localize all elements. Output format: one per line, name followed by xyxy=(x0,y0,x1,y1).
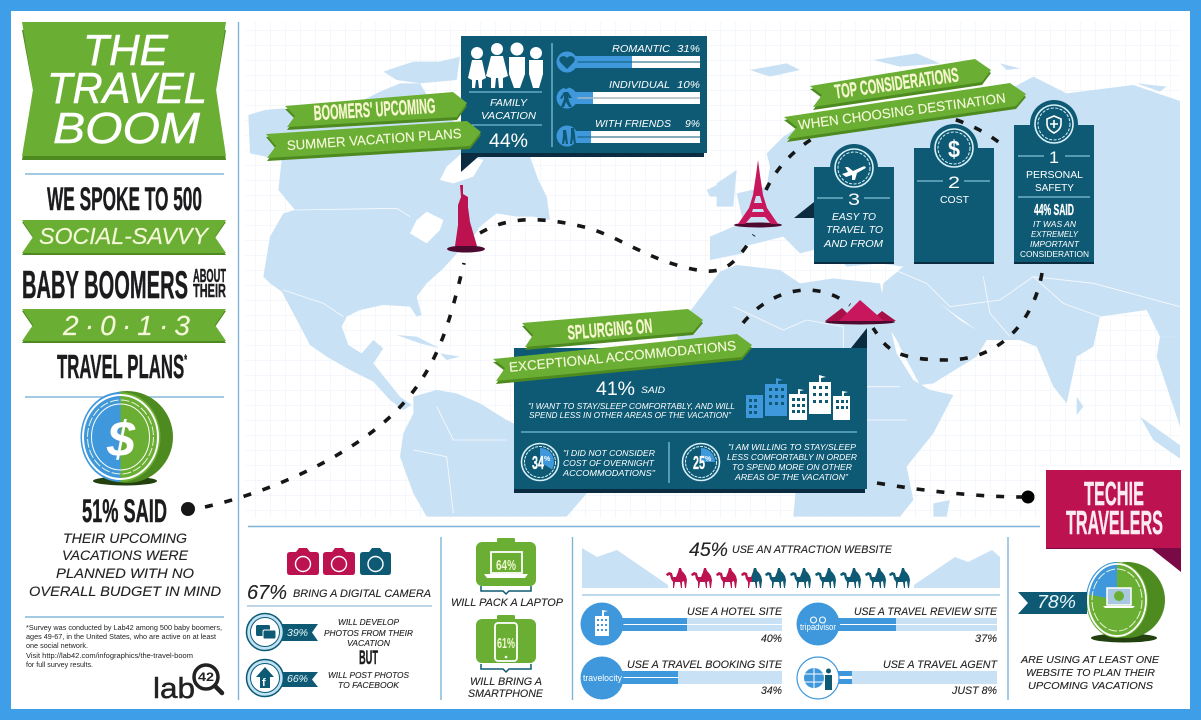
ribbon: social-savvy: SOCIAL-SAVVY xyxy=(39,223,210,249)
bar: travel review site 37%: USE A TRAVEL REVIEW SITE xyxy=(854,606,998,618)
card: 3 easy to travel: TRAVEL TO xyxy=(826,224,883,236)
card: 2 cost xyxy=(914,124,994,264)
ribbon: 78% xyxy=(1018,592,1087,614)
icon: suitcase with smartphone xyxy=(476,615,536,672)
stat: 66% post to facebook: WILL POST PHOTOS xyxy=(328,670,409,680)
panel: exceptional accommodations xyxy=(514,328,867,493)
icon: airplane badge xyxy=(835,149,873,187)
bar: hotel site 40% xyxy=(580,602,783,646)
stat: 34%: COST OF OVERNIGHT xyxy=(563,459,655,468)
stat: 34%: "I DID NOT CONSIDER xyxy=(563,449,655,458)
section: camera and photos: BUT xyxy=(359,648,378,669)
stat: 45% attraction website: USE AN ATTRACTION WEBSITE xyxy=(732,544,893,556)
stat: 25% xyxy=(682,443,857,482)
stat: 41% said xyxy=(528,378,735,420)
stat: 39% develop photos: VACATION xyxy=(347,638,391,648)
section: website usage xyxy=(580,539,1000,700)
desert mountains xyxy=(582,548,1000,588)
icon: shield badge xyxy=(1035,105,1073,143)
white area behind techie header and lower panel xyxy=(1040,466,1181,526)
bar: romantic 31%: 31% xyxy=(677,43,700,55)
card: 2 cost: COST xyxy=(940,194,970,206)
icon: cameras xyxy=(287,548,391,575)
landmark: statue of liberty xyxy=(447,185,485,252)
ribbon: 2013: 2·0·1·3 xyxy=(62,310,190,341)
stat: 45% attraction website: 45% xyxy=(689,539,728,561)
card: 1 personal safety: SAFETY xyxy=(1035,182,1074,194)
route end dot: techie xyxy=(1017,495,1024,499)
label: will bring a smartphone xyxy=(468,676,544,700)
card: 3 easy to travel: EASY TO xyxy=(832,211,876,223)
footnote: *Survey was conducted by Lab42 among 500 baby boomers, xyxy=(26,623,222,632)
footnote: Visit http://lab42.com/infographics/the-travel-boom xyxy=(26,651,193,660)
bar: hotel site 40%: USE A HOTEL SITE xyxy=(687,606,783,618)
text: budget description xyxy=(29,531,221,599)
logo: lab42: 42 xyxy=(198,672,214,684)
card: 1 personal safety: IMPORTANT xyxy=(1030,240,1080,249)
stat: 25%: LESS COMFORTABLY IN ORDER xyxy=(727,453,857,462)
section: 78% planning online xyxy=(1018,562,1165,692)
stat: 25%: TO SPEND MORE ON OTHER xyxy=(732,463,852,472)
text: website planning xyxy=(1020,654,1160,692)
world map background xyxy=(245,22,1187,518)
icon: dollar badge: $ xyxy=(948,136,961,163)
ribbon: top considerations xyxy=(810,59,991,110)
text: baby boomers about their: THEIR xyxy=(193,281,226,301)
stat: 39% develop photos: PHOTOS FROM THEIR xyxy=(324,628,413,638)
footnote: ages 49-67, in the United States, who are active on at least xyxy=(26,632,217,641)
icon: laptop coin xyxy=(1086,562,1165,642)
bar: individual 10%: 10% xyxy=(677,79,700,91)
text: travel plans: TRAVEL PLANS xyxy=(57,348,307,385)
route end dot: survey xyxy=(181,502,195,516)
text: budget description: THEIR UPCOMING xyxy=(63,531,187,546)
bar: with friends 9%: 9% xyxy=(685,118,700,130)
text: baby boomers about their: BABY BOOMERS xyxy=(22,264,188,307)
label: will pack a laptop: WILL PACK A LAPTOP xyxy=(451,597,564,609)
card: 1 personal safety: CONSIDERATION xyxy=(1020,250,1089,259)
card: 1 personal safety: IT WAS AN xyxy=(1033,220,1076,229)
card: 1 personal safety: EXTREMELY xyxy=(1031,230,1079,239)
panel: techie travelers header xyxy=(1046,470,1181,572)
landmark: pyramids xyxy=(825,300,896,324)
stat: 67% digital camera: BRING A DIGITAL CAMERA xyxy=(293,588,431,600)
stat: 41% said: 41% xyxy=(596,378,635,400)
bar: romantic 31%: ROMANTIC xyxy=(612,44,671,55)
bar: travel agent just 8%: JUST 8% xyxy=(951,685,997,697)
stat: 41% said: SPEND LESS IN OTHER AREAS OF THE VACATION" xyxy=(529,411,732,420)
icon: hotels xyxy=(746,375,850,420)
bar: travel review site 37%: tripadvisor xyxy=(800,622,836,632)
label: will bring a smartphone: WILL BRING A xyxy=(470,676,542,688)
bar: travel booking site 34% xyxy=(580,656,783,700)
ribbon: splurging on: SPLURGING ON xyxy=(567,315,653,345)
label: family vacation 44%: 44% xyxy=(489,130,528,152)
stat: 67% digital camera xyxy=(247,582,431,604)
ribbon: exceptional accommodations xyxy=(493,334,752,384)
landmark: eiffel tower xyxy=(734,160,782,228)
text: travel plans: * xyxy=(184,351,187,367)
card: 1 personal safety: 44% SAID xyxy=(1034,202,1074,219)
section: camera and photos xyxy=(246,548,432,696)
bar: individual 10% xyxy=(556,79,700,108)
stat: 25%: "I AM WILLING TO STAY/SLEEP xyxy=(728,443,857,452)
ribbon: when choosing destination: WHEN CHOOSING DESTINATION xyxy=(797,90,1006,133)
stat: 45% attraction website xyxy=(689,539,893,561)
ribbon: top considerations: TOP CONSIDERATIONS xyxy=(833,64,960,104)
title banner xyxy=(22,22,226,160)
left sidebar xyxy=(22,22,226,705)
ribbon: splurging on xyxy=(522,309,703,350)
card: 3 easy to travel: 3 xyxy=(848,190,860,209)
ribbon: when choosing destination xyxy=(784,83,1026,142)
text: budget description: OVERALL BUDGET IN MIND xyxy=(29,584,221,599)
ribbon: 2013 xyxy=(22,309,226,343)
bar: travel booking site 34%: USE A TRAVEL BOOKING SITE xyxy=(627,659,783,671)
bar: romantic 31% xyxy=(556,43,700,72)
stat: 66% post to facebook: f xyxy=(262,677,266,689)
stat: 25%: 25 xyxy=(693,453,705,473)
icon row: camels xyxy=(666,568,910,588)
stat: 67% digital camera: 67% xyxy=(247,582,287,604)
stat: 34% xyxy=(522,444,656,480)
stat: 34%: 34 xyxy=(532,453,544,473)
icon: dollar coin: $ xyxy=(106,411,136,467)
label: family vacation 44%: FAMILY xyxy=(490,97,528,109)
icon: suitcase with laptop: 64% xyxy=(496,557,516,574)
stat: 25%: AREAS OF THE VACATION" xyxy=(734,473,849,482)
stat: 51% said: 51% SAID xyxy=(82,493,167,529)
stat: 66% post to facebook: TO FACEBOOK xyxy=(338,680,399,690)
bar: travel booking site 34%: 34% xyxy=(761,685,782,697)
icon: suitcase with laptop xyxy=(476,538,536,594)
survey intro: we spoke to 500: WE SPOKE TO 500 xyxy=(47,181,202,217)
dashed travel route xyxy=(205,110,1042,507)
bar: travel review site 37% xyxy=(796,602,998,646)
bar: travel agent just 8% xyxy=(797,657,998,699)
title banner: TRAVEL xyxy=(47,64,207,113)
text: website planning: UPCOMING VACATIONS xyxy=(1028,680,1153,692)
text: baby boomers about their xyxy=(22,264,226,307)
label: family vacation 44%: VACATION xyxy=(481,110,536,122)
stat: 39% develop photos xyxy=(246,614,413,650)
footnote: one social network. xyxy=(26,641,88,650)
ribbon: exceptional accommodations: EXCEPTIONAL ACCOMMODATIONS xyxy=(508,338,737,375)
stat: 39% develop photos: WILL DEVELOP xyxy=(338,617,399,627)
bar: with friends 9% xyxy=(556,118,700,146)
text: budget description: PLANNED WITH NO xyxy=(56,566,195,581)
icon: family xyxy=(468,42,543,88)
stat: 66% post to facebook xyxy=(246,660,409,696)
stat: 66% post to facebook: 66% xyxy=(287,673,308,685)
ribbon: social-savvy xyxy=(22,220,226,255)
stat: 34%: ACCOMMODATIONS" xyxy=(562,469,656,478)
footnote: for full survey results. xyxy=(26,660,93,669)
stat: 34%: % xyxy=(544,456,551,463)
logo: lab42: lab xyxy=(153,673,195,705)
footnote xyxy=(26,623,222,669)
bar: hotel site 40%: 40% xyxy=(761,633,782,645)
label: will bring a smartphone: SMARTPHONE xyxy=(468,688,544,700)
title banner: THE xyxy=(83,26,169,75)
text: website planning: ARE USING AT LEAST ONE xyxy=(1020,654,1160,666)
panel: family vacation xyxy=(461,36,707,172)
title banner: BOOM xyxy=(53,104,200,153)
stat: 41% said: SAID xyxy=(641,385,666,395)
stat: 41% said: "I WANT TO STAY/SLEEP COMFORTABLY, AND WILL xyxy=(528,402,735,411)
ribbon: summer vacation plans: SUMMER VACATION PLANS xyxy=(286,126,462,153)
icon: dollar coin xyxy=(80,391,173,486)
text: baby boomers about their: ABOUT xyxy=(193,266,226,286)
logo: lab42 xyxy=(153,665,222,705)
stat: 39% develop photos: 39% xyxy=(287,627,308,639)
icon: suitcase with smartphone: 61% xyxy=(497,635,515,652)
bar: with friends 9%: WITH FRIENDS xyxy=(595,119,671,130)
bar: travel review site 37%: 37% xyxy=(975,633,997,645)
card: 3 easy to travel xyxy=(794,144,894,264)
bar: travel agent just 8%: USE A TRAVEL AGENT xyxy=(883,659,998,671)
card: 1 personal safety xyxy=(1014,100,1094,264)
ribbon: summer vacation plans xyxy=(266,121,481,161)
text: budget description: VACATIONS WERE xyxy=(62,548,189,563)
ribbon: 78%: 78% xyxy=(1037,592,1076,612)
column dividers xyxy=(238,22,1040,700)
stat: 25%: % xyxy=(705,456,712,463)
bar: individual 10%: INDIVIDUAL xyxy=(609,80,670,91)
label: family vacation 44% xyxy=(481,97,536,152)
card: 3 easy to travel: AND FROM xyxy=(823,238,883,250)
bar: travel booking site 34%: travelocity xyxy=(583,673,622,683)
card: 2 cost: 2 xyxy=(948,173,960,192)
card: 1 personal safety: 1 xyxy=(1049,148,1059,167)
text: website planning: WEBSITE TO PLAN THEIR xyxy=(1026,667,1155,679)
ribbon: boomers' upcoming: BOOMERS' UPCOMING xyxy=(313,95,436,125)
card: 1 personal safety: PERSONAL xyxy=(1026,169,1083,181)
section: luggage devices xyxy=(451,538,564,700)
ribbon: boomers' upcoming xyxy=(285,92,467,130)
